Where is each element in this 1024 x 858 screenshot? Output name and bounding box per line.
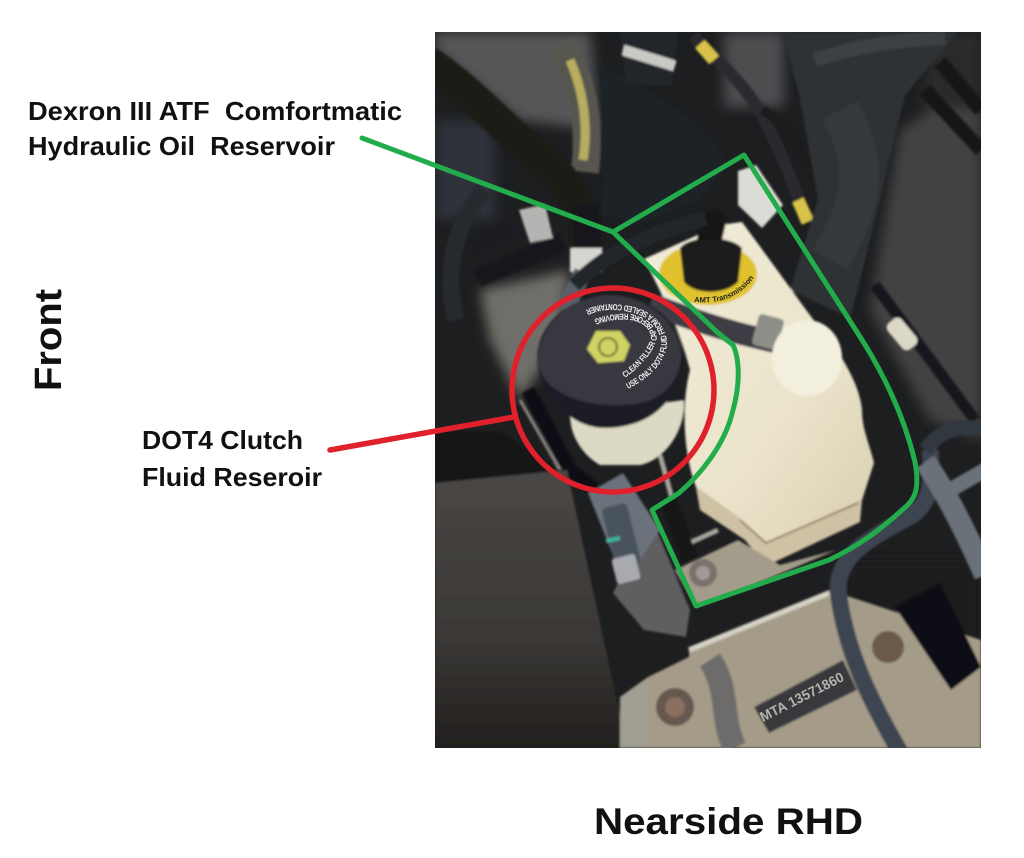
label: DOT4 clutch reservoir: Fluid Reseroir: [142, 462, 322, 492]
bolts on plate: [656, 631, 904, 726]
red circle: clutch reservoir: [512, 288, 714, 492]
white reservoir cap: [772, 320, 842, 396]
grey connector bracket: [588, 473, 660, 560]
black intake body: [600, 78, 642, 208]
label: Front: Front: [28, 289, 70, 391]
red leader line: [330, 417, 514, 450]
label: Nearside RHD: Nearside RHD: [594, 801, 863, 842]
reservoir neck: [738, 165, 783, 228]
spring and cable left of clutch reservoir: [528, 390, 595, 490]
engine bay photo: [428, 32, 985, 752]
label: Dexron reservoir: [28, 96, 402, 161]
hose with yellow bands: [693, 36, 806, 222]
clutch cap warning text: USE ONLY DOT4 FLUID FROM A SEALED CONTAINER: [586, 304, 668, 388]
plate stamped number: MTA 13571860: [757, 669, 847, 725]
green outline: Comfortmatic reservoir with leader line: [362, 138, 917, 606]
corrugated duct with yellow band: [560, 46, 587, 172]
clutch reservoir cap top face: [537, 295, 681, 405]
main reservoir body: [644, 222, 874, 543]
thick wiring loom: [428, 62, 588, 250]
yellow brake symbol: [587, 331, 630, 363]
ribbed panel and pipe right: [925, 62, 981, 150]
reservoir lower lip: [696, 487, 862, 566]
metal gearbox plate: [620, 590, 981, 748]
label: Dexron reservoir: Hydraulic Oil Reservoir: [28, 131, 335, 161]
clutch cap warning text: CLEAN FILLER CAP BEFORE REMOVING: [594, 314, 657, 377]
black connector: [895, 583, 981, 690]
clutch reservoir body: [570, 400, 684, 465]
label: DOT4 clutch reservoir: DOT4 Clutch: [142, 425, 303, 455]
left wiring: [451, 190, 484, 320]
yellow label text: AMT Transmission: [694, 276, 754, 302]
front lower housing: [435, 470, 627, 748]
lower right hoses: [838, 450, 931, 752]
grey casting: [613, 533, 690, 637]
black filler cap: [680, 238, 742, 292]
yellow caution label: [659, 243, 757, 305]
label: Dexron reservoir: Dexron III ATF Comfortmatic: [28, 96, 402, 126]
right corrugated air hose: [783, 32, 958, 318]
label: DOT4 clutch reservoir: [142, 425, 322, 492]
clutch reservoir cap rim: [537, 295, 682, 428]
metal pipes and bracket: [660, 455, 718, 545]
hose over reservoir: [574, 218, 706, 285]
white tape and corrugated hose: [570, 248, 602, 272]
MTA stamped plate: [754, 660, 857, 733]
